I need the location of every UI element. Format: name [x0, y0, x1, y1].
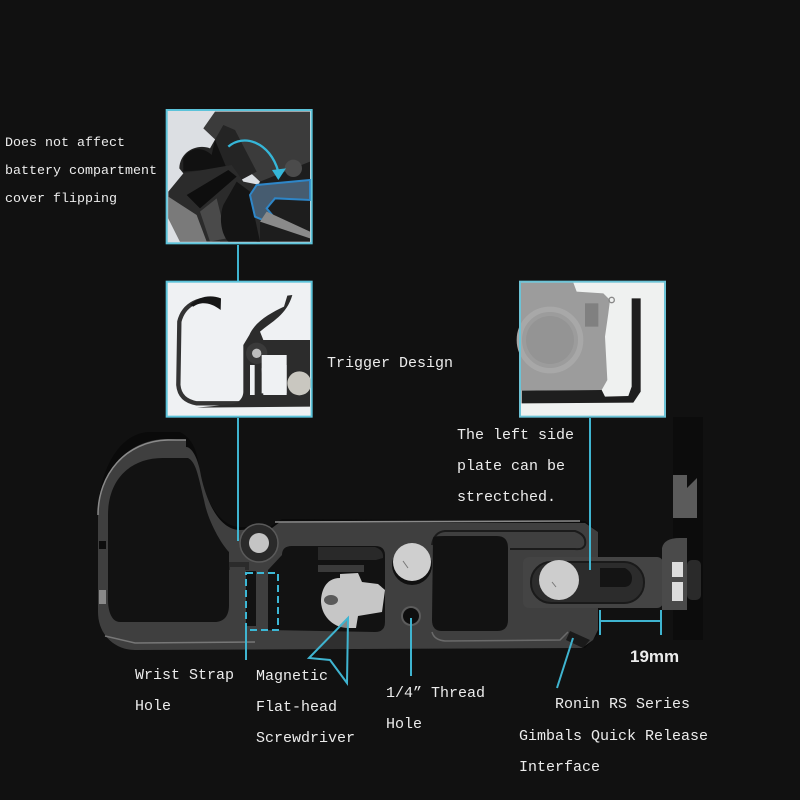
icon: rotation arrow	[228, 141, 286, 180]
text: battery compartment note	[5, 136, 157, 207]
arrow: screwdriver pointer	[309, 618, 348, 683]
text: wrist strap hole: Hole	[135, 698, 171, 715]
text: side plate note: plate can be	[457, 458, 565, 475]
connector: panel lines	[238, 245, 590, 570]
slider bar	[523, 557, 663, 608]
icon: flat-head coin screw	[321, 573, 385, 628]
pivot pin	[240, 524, 278, 562]
panel: battery cover photo	[167, 110, 312, 243]
callout: wrist strap dashed box	[246, 573, 278, 630]
center screw	[392, 543, 432, 585]
text: side plate note	[457, 427, 574, 506]
dimension: 19mm	[600, 610, 679, 666]
text: side plate note: The left side	[457, 427, 574, 444]
text: thread hole	[386, 685, 485, 733]
text: battery compartment note: battery compartment	[5, 164, 157, 179]
callout: leader lines	[246, 618, 573, 688]
text: battery compartment note: cover flipping	[5, 192, 117, 207]
text: screwdriver	[256, 668, 355, 747]
product: L bracket plate	[98, 417, 703, 650]
thread hole	[401, 606, 421, 626]
side plate	[662, 417, 703, 640]
text: screwdriver: Screwdriver	[256, 730, 355, 747]
text: gimbal interface	[519, 696, 708, 776]
screw hole frame	[432, 536, 508, 631]
strap slots	[246, 571, 318, 626]
text: wrist strap hole: Wrist Strap	[135, 667, 234, 684]
text: gimbal interface: Ronin RS Series	[555, 696, 690, 713]
text: thread hole: 1/4” Thread	[386, 685, 485, 702]
panel: trigger design diagram	[167, 282, 312, 417]
dimension: 19mm: 19mm	[630, 647, 679, 666]
text: side plate note: strectched.	[457, 489, 556, 506]
text: battery compartment note: Does not affect	[5, 136, 125, 151]
text: screwdriver: Magnetic	[256, 668, 328, 685]
text: wrist strap hole	[135, 667, 234, 715]
panel: camera with side plate diagram	[519, 282, 665, 417]
text: trigger design: Trigger Design	[327, 355, 453, 372]
text: screwdriver: Flat-head	[256, 699, 337, 716]
text: gimbal interface: Interface	[519, 759, 600, 776]
text: thread hole: Hole	[386, 716, 422, 733]
text: gimbal interface: Gimbals Quick Release	[519, 728, 708, 745]
